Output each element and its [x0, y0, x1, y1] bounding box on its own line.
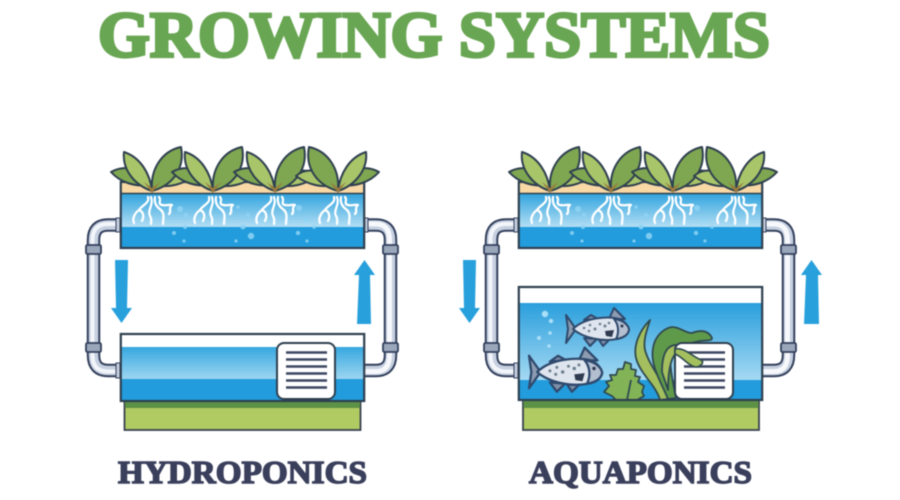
bubbles [537, 311, 553, 348]
label: aquaponics: AQUAPONICS [529, 454, 752, 490]
reservoir base [124, 401, 360, 430]
aquarium base [523, 401, 759, 430]
pump [675, 343, 733, 399]
fish: lower [529, 348, 602, 392]
seaweed [635, 320, 712, 400]
label: hydroponics: HYDROPONICS [118, 454, 367, 490]
top grow tank with plants: hydroponics [111, 147, 379, 248]
aquarium outline [519, 287, 762, 400]
arrow: flow down [459, 260, 480, 323]
lettuce plant [604, 362, 644, 400]
arrow: flow down [111, 260, 132, 323]
pipes: aquaponics [484, 218, 796, 378]
top grow tank with plants: aquaponics [509, 147, 777, 248]
arrow: flow up [354, 260, 375, 324]
panel: aquaponics system [459, 147, 822, 430]
pipes: hydroponics [86, 218, 398, 378]
reservoir tank [121, 334, 364, 401]
aquarium tank [519, 287, 762, 400]
arrow: flow up [801, 260, 822, 324]
fish: upper [566, 308, 629, 346]
pump [277, 343, 335, 399]
title: GROWING SYSTEMS [98, 0, 770, 72]
panel: hydroponics system [86, 147, 398, 430]
